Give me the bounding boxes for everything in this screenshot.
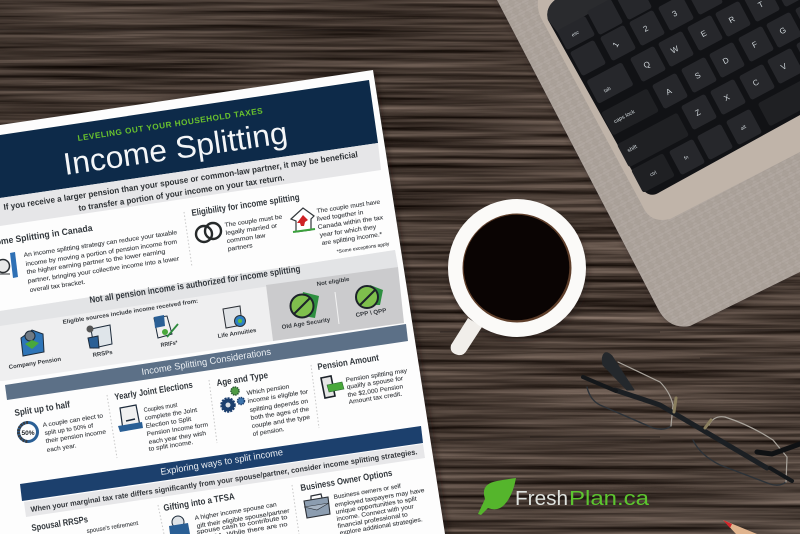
icon: gears <box>222 387 244 412</box>
coffee cup <box>448 199 589 355</box>
keyboard: caps lock <box>613 109 636 125</box>
panel: business owner options: unique opportunities to split <box>335 495 418 516</box>
panel: pension amount: the $2,000 Pension <box>347 383 404 399</box>
panel: spousal RRSPs: Spousal RRSPs <box>31 514 89 533</box>
panel: yearly joint elections: each year they wish <box>148 430 207 446</box>
icon: leaf <box>478 478 516 515</box>
pencil <box>723 520 757 534</box>
icon: company pension <box>21 330 44 356</box>
keyboard: 3 <box>671 9 679 19</box>
panel: split up to half: split up to 50% of <box>44 422 94 437</box>
panel: not eligible: Old Age Security <box>281 317 331 331</box>
panel: income splitting in Canada: overall tax bracket. <box>29 279 86 294</box>
panel: not eligible: Not eligible <box>316 277 351 288</box>
panel: pension amount: Pension splitting may <box>345 367 409 384</box>
keyboard: esc <box>571 29 581 39</box>
panel: yearly joint elections: Election to Split <box>145 416 192 430</box>
panel: split up to half: Split up to half <box>14 399 71 418</box>
intro strip: to transfer a portion of your income on your tax return. <box>78 172 285 213</box>
keyboard: G <box>778 25 788 36</box>
icon: rings <box>196 223 221 242</box>
panel: age and type: splitting depends on <box>249 398 309 414</box>
infographic paper <box>0 70 449 534</box>
icon: briefcase <box>304 494 330 518</box>
keyboard: ctrl <box>649 170 658 178</box>
keyboard: C <box>751 77 761 88</box>
keyboard: S <box>693 71 702 81</box>
keyboard: D <box>721 55 731 66</box>
keyboard: E <box>699 29 708 39</box>
keyboard <box>547 0 800 195</box>
keyboard: A <box>664 86 674 97</box>
panel: eligibility: The couple must have <box>316 199 381 215</box>
panel: not eligible <box>266 267 404 341</box>
panel: yearly joint elections: Couples must <box>143 402 178 414</box>
cup handle <box>451 318 482 355</box>
section band: considerations <box>5 324 408 400</box>
panel: eligibility: lived together in <box>316 209 364 223</box>
keyboard: fn <box>683 154 690 162</box>
panel: business owner options: income. Connect with your <box>336 503 414 523</box>
panel: split up to half: each year. <box>46 442 77 454</box>
eyeglasses <box>583 353 800 485</box>
panel: pension amount: Pension Amount <box>317 352 380 372</box>
keyboard: alt <box>740 124 748 132</box>
panel: age and type: Which pension <box>246 383 290 397</box>
intro strip: If you receive a larger pension than your spouse or common-law partner, it may be beneficial <box>3 149 358 212</box>
panel: pension amount: qualify a spouse for <box>346 375 404 391</box>
title: Income Splitting <box>61 115 290 182</box>
panel: eligibility: common law <box>226 232 267 245</box>
panel: yearly joint elections: to split income. <box>148 439 194 453</box>
FreshPlan logo: Fresh <box>515 488 568 510</box>
panel: age and type <box>216 370 311 438</box>
panel: business owner options: employed taxpayers may have <box>334 487 426 509</box>
icon: 50 percent ring: 50% <box>21 430 35 437</box>
keyboard: 2 <box>642 24 650 34</box>
panel: gifting into a TFSA <box>163 491 290 534</box>
FreshPlan logo: Plan.ca <box>569 488 650 510</box>
panel: gifting into a TFSA: A higher income spouse can <box>194 501 277 522</box>
panel: pension amount <box>317 352 409 406</box>
laptop <box>497 0 800 327</box>
panel: age and type: income is eligible for <box>247 389 309 405</box>
panel: eligible sources: Company Pension <box>8 357 62 371</box>
panel: business owner options <box>300 468 426 534</box>
icon: life annuities <box>223 306 246 328</box>
panel: business owner options: Business owners or self <box>333 483 402 501</box>
panel: income splitting in Canada <box>0 223 180 294</box>
icon: RRSPs <box>86 325 112 348</box>
panel: eligible sources: Eligible sources include income received from: <box>62 299 199 326</box>
panel: age and type: couple and the type <box>251 414 311 430</box>
icon: house with maple leaf <box>291 208 315 232</box>
panel: eligibility: The couple must be <box>224 213 283 229</box>
panel: eligibility: Canada within the tax <box>317 214 384 231</box>
panel: eligibility: Eligibility for income splitting <box>191 192 300 218</box>
panel: eligibility: are splitting income.* <box>321 231 383 247</box>
panel: eligibility: year for which they <box>319 223 378 239</box>
panel: business owner options: financial professional to <box>337 511 409 530</box>
keyboard: F <box>751 40 759 50</box>
panel: eligible sources: Life Annuities <box>217 328 258 340</box>
panel: gifting into a TFSA: gift their eligible spouse/partner <box>196 508 290 530</box>
strip: marginal tax rate: When your marginal tax rate differs significantly from your spouse/partner, consider income splitting strategies. <box>30 447 418 514</box>
section band: exploring ways <box>20 426 423 501</box>
header band <box>0 80 378 198</box>
kicker: LEVELING OUT YOUR HOUSEHOLD TAXES <box>77 106 264 143</box>
panel: not eligible: CPP \ QPP <box>355 308 387 319</box>
panel: income splitting in Canada: the higher earning partner to the lower earning <box>26 248 166 276</box>
icon: form <box>118 405 143 432</box>
panel: yearly joint elections: Pension Income form <box>146 421 209 438</box>
icon: TFSA piggy bank <box>169 516 190 534</box>
panel: eligible sources <box>0 250 398 381</box>
section band: considerations: Income Splitting Considerations <box>141 346 272 377</box>
laptop palm rest bevel <box>538 0 800 220</box>
panel: split up to half <box>14 399 107 454</box>
keyboard: Q <box>642 59 652 70</box>
panel: spousal RRSPs <box>31 514 139 534</box>
keyboard: tab <box>603 86 612 94</box>
coffee surface <box>462 214 572 322</box>
panel: eligibility: partners <box>227 242 253 253</box>
panel: yearly joint elections: complete the Joint <box>144 407 198 422</box>
icon: RRIFs <box>154 315 178 338</box>
panel: gifting into a TFSA: Gifting into a TFSA <box>163 491 236 513</box>
icon: old age security <box>290 292 319 318</box>
keyboard: 1 <box>611 40 621 49</box>
panel: income splitting in Canada: partner, bringing your collective income into a lower <box>27 255 180 285</box>
panel: eligibility <box>191 192 390 254</box>
icon: balance <box>0 252 18 278</box>
keyboard: W <box>669 44 681 56</box>
keyboard: Z <box>694 108 702 118</box>
panel: split up to half: their pension income <box>45 428 107 445</box>
keyboard: R <box>727 14 737 25</box>
panel: income splitting in Canada: income by moving a portion of pension income from <box>25 238 178 268</box>
panel: age and type: both the ages of the <box>250 406 310 422</box>
panel: yearly joint elections <box>114 380 209 453</box>
panel: eligible sources: RRIFs* <box>160 340 179 349</box>
panel: yearly joint elections: Yearly Joint Elections <box>114 380 193 402</box>
panel: income splitting in Canada: An income splitting strategy can reduce your taxable <box>23 229 178 259</box>
section band: exploring ways: Exploring ways to split income <box>160 446 284 477</box>
panel: age and type: of pension. <box>252 426 285 438</box>
icon: phone and money <box>321 376 344 398</box>
panel: business owner options: Business Owner Options <box>300 468 393 493</box>
icon: CPP QPP <box>356 285 383 308</box>
panel: eligible sources: RRSPs <box>92 350 114 359</box>
FreshPlan logo <box>478 478 650 515</box>
panel: age and type: Age and Type <box>216 370 269 388</box>
keyboard: V <box>779 61 789 72</box>
panel: eligible sources: Not all pension income is authorized for income splitting <box>89 264 301 305</box>
panel: pension amount: Amount tax credit. <box>348 391 403 406</box>
keyboard: shift <box>627 144 639 154</box>
keyboard: X <box>722 92 732 103</box>
panel: split up to half: A couple can elect to <box>42 412 104 429</box>
panel: eligibility: *Some exceptions apply <box>336 241 390 254</box>
panel: eligibility: legally married or <box>225 222 278 237</box>
laptop body <box>497 0 800 327</box>
